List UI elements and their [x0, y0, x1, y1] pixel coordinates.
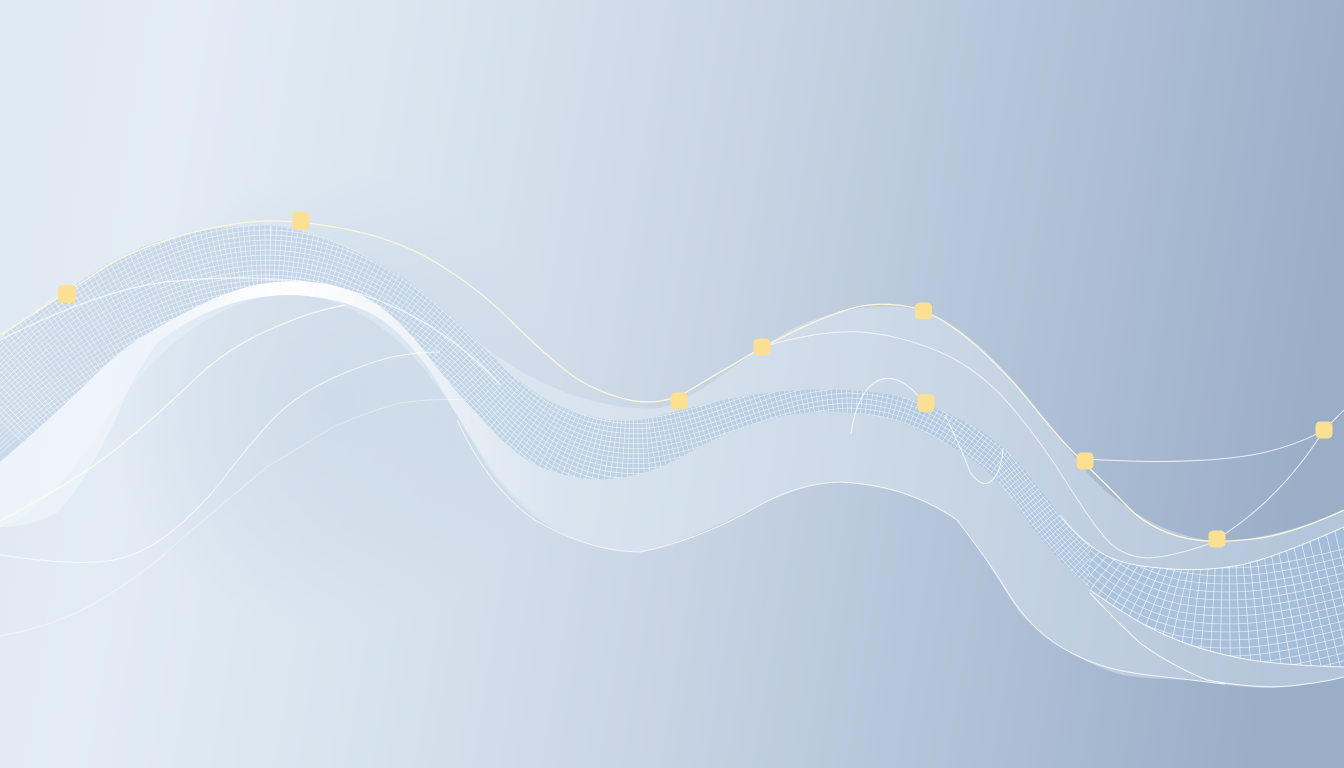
mesh lower border	[1090, 590, 1344, 667]
node 7	[1076, 452, 1094, 470]
small loop	[945, 415, 1003, 484]
link 1	[1085, 430, 1324, 461]
gold connecting line	[0, 221, 1344, 541]
link 2	[1217, 430, 1324, 539]
yellow nodes	[58, 212, 1332, 548]
fine mesh, left and centre	[0, 225, 1090, 588]
mesh band	[0, 226, 1344, 666]
curve 3	[0, 399, 467, 636]
node 2	[58, 285, 76, 303]
link 3	[1324, 410, 1344, 430]
second line	[762, 332, 1217, 558]
node 4	[754, 338, 770, 356]
lowest edge	[1090, 593, 1344, 687]
node 3	[670, 392, 688, 410]
fine cross lines	[0, 226, 1090, 588]
small arc	[851, 378, 920, 434]
fine long lines	[0, 226, 1090, 588]
mesh base fill	[0, 226, 1344, 666]
wide long lines	[1090, 548, 1344, 666]
node 9	[1316, 422, 1332, 438]
translucent main ribbon	[0, 226, 1344, 688]
mesh upper border	[1060, 515, 1344, 570]
wider mesh, right	[1090, 528, 1344, 666]
white crest ribbon	[0, 281, 570, 530]
wide cross lines	[1090, 528, 1344, 666]
ribbon lower edge lines	[457, 332, 1344, 687]
mesh central highlight line	[0, 278, 500, 385]
curve 2	[0, 352, 440, 562]
curve 1	[0, 305, 345, 521]
node links, right side	[1085, 410, 1344, 539]
lower edge right	[840, 482, 1225, 684]
lower edge left	[457, 420, 840, 552]
node 5	[915, 302, 932, 320]
node 6	[918, 394, 934, 412]
thin white curves, lower left	[0, 305, 467, 636]
shading under the arch	[100, 170, 560, 630]
node 8	[1208, 530, 1226, 548]
node 1	[292, 212, 310, 230]
